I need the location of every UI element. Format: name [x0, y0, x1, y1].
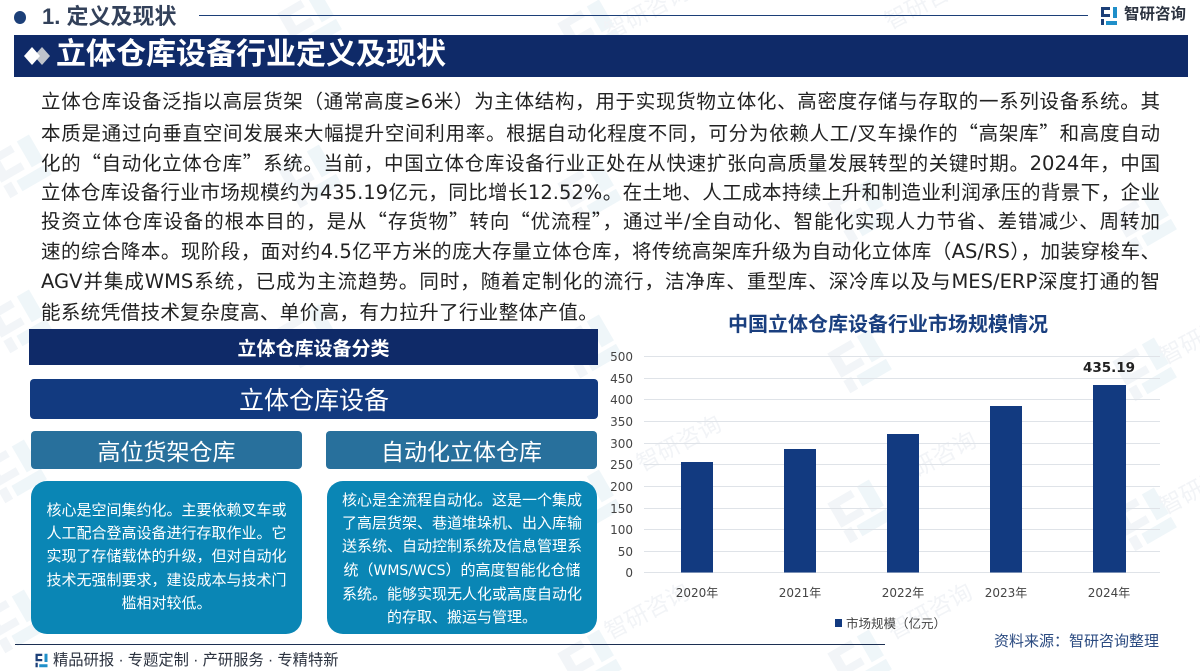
- bar chart: 350: [610, 415, 633, 429]
- bar chart: 市场规模（亿元）: [846, 616, 946, 631]
- bar chart: 435.19: [1083, 360, 1135, 376]
- intro paragraph: 速的综合降本。现阶段，面对约4.5亿平方米的庞大存量立体仓库，将传统高架库升级为自动化立体库（AS/RS），加装穿梭车、: [41, 240, 1160, 263]
- brand name: 智研咨询: [1124, 6, 1186, 23]
- box: automated warehouse header: 自动化立体仓库: [381, 439, 542, 465]
- icon: double diamonds: [24, 47, 50, 65]
- text: 智研咨询: [632, 410, 726, 476]
- card: high rack warehouse description: 人工配合登高设备进行存取作业。它: [46, 524, 286, 542]
- main title: 立体仓库设备行业定义及现状: [56, 38, 446, 71]
- card: high rack warehouse description: 技术无强制要求，建设成本与技术门: [46, 571, 286, 589]
- bar chart: 400: [610, 393, 633, 407]
- header rule: [199, 15, 1088, 16]
- bar chart: 2022年: [882, 586, 924, 600]
- intro paragraph: 化的“自动化立体仓库”系统。当前，中国立体仓库设备行业正处在从快速扩张向高质量发展转型的关键时期。2024年，中国: [41, 147, 1160, 176]
- card: high rack warehouse description: 槛相对较低。: [121, 594, 212, 612]
- card: automated warehouse description: 核心是全流程自动化。这是一个集成: [342, 491, 582, 509]
- box: root category: 立体仓库设备: [239, 387, 389, 415]
- bar chart: 2024年: [1088, 586, 1130, 600]
- icon: brand logo: [1101, 7, 1117, 25]
- card: high rack warehouse description: 核心是空间集约化。主要依赖叉车或: [46, 501, 286, 519]
- bar chart: 500: [610, 350, 633, 364]
- card: high rack warehouse description: [31, 481, 302, 634]
- bar chart: 450: [610, 372, 633, 386]
- source note: 资料来源：智研咨询整理: [994, 633, 1159, 650]
- bar chart: 2023年: [985, 586, 1027, 600]
- icon: footer logo: [36, 654, 48, 668]
- footer rule: [15, 644, 885, 645]
- text: 智研咨询: [883, 578, 977, 644]
- panel heading: classification: [29, 329, 598, 365]
- intro paragraph: 本质是通过向垂直空间发展来大幅提升空间利用率。根据自动化程度不同，可分为依赖人工/叉车操作的“高架库”和高度自动: [41, 117, 1160, 146]
- text: 智研咨询: [600, 578, 694, 644]
- bar chart: 300: [610, 437, 633, 451]
- box: root category: [30, 379, 598, 419]
- card: automated warehouse description: [327, 481, 597, 634]
- bar chart: 200: [610, 480, 633, 494]
- title band: [14, 35, 1188, 77]
- bar chart: 100: [610, 523, 633, 537]
- bar chart: 250: [610, 458, 633, 472]
- card: automated warehouse description: 的存取、搬运与管理。: [387, 608, 537, 626]
- card: automated warehouse description: 统（WMS/WCS）的高度智能化仓储: [343, 561, 581, 579]
- bar chart: 50: [618, 545, 633, 559]
- card: automated warehouse description: 送系统、自动控制系统及信息管理系: [342, 537, 582, 555]
- section heading: 1. 定义及现状: [42, 4, 176, 29]
- intro paragraph: [41, 90, 1160, 324]
- section bullet: [14, 11, 26, 24]
- intro paragraph: AGV并集成WMS系统，已成为主流趋势。同时，随着定制化的流行，洁净库、重型库、深冷库以及与MES/ERP深度打通的智: [41, 270, 1160, 293]
- chart title: 中国立体仓库设备行业市场规模情况: [728, 314, 1048, 336]
- card: high rack warehouse description: 实现了存储载体的升级，但对自动化: [46, 547, 286, 565]
- intro paragraph: 投资立体仓库设备的根本目的，是从“存货物”转向“优流程”，通过半/全自动化、智能化实现人力节省、差错减少、周转加: [41, 205, 1160, 234]
- bar chart: 150: [610, 502, 633, 516]
- footer slogan: 精品研报 · 专题定制 · 产研服务 · 专精特新: [53, 652, 339, 669]
- box: high rack warehouse header: 高位货架仓库: [98, 439, 236, 465]
- intro paragraph: 能系统凭借技术复杂度高、单价高，有力拉升了行业整体产值。: [41, 301, 598, 324]
- text: 智研咨询: [887, 426, 981, 492]
- box: automated warehouse header: [326, 431, 597, 469]
- intro paragraph: 立体仓库设备行业市场规模约为435.19亿元，同比增长12.52%。在土地、人工成本持续上升和制造业利润承压的背景下，企业: [41, 181, 1160, 204]
- bar chart: 0: [625, 566, 633, 580]
- card: automated warehouse description: 系统。能够实现无人化或高度自动化: [342, 585, 582, 603]
- bar chart: 2020年: [676, 586, 718, 600]
- intro paragraph: 立体仓库设备泛指以高层货架（通常高度≥6米）为主体结构，用于实现货物立体化、高密度存储与存取的一系列设备系统。其: [41, 90, 1160, 113]
- card: automated warehouse description: 了高层货架、巷道堆垛机、出入库输: [342, 514, 582, 532]
- bar chart: [610, 350, 1160, 631]
- panel heading: classification: 立体仓库设备分类: [237, 338, 390, 360]
- bar chart: 2021年: [779, 586, 821, 600]
- box: high rack warehouse header: [31, 431, 302, 469]
